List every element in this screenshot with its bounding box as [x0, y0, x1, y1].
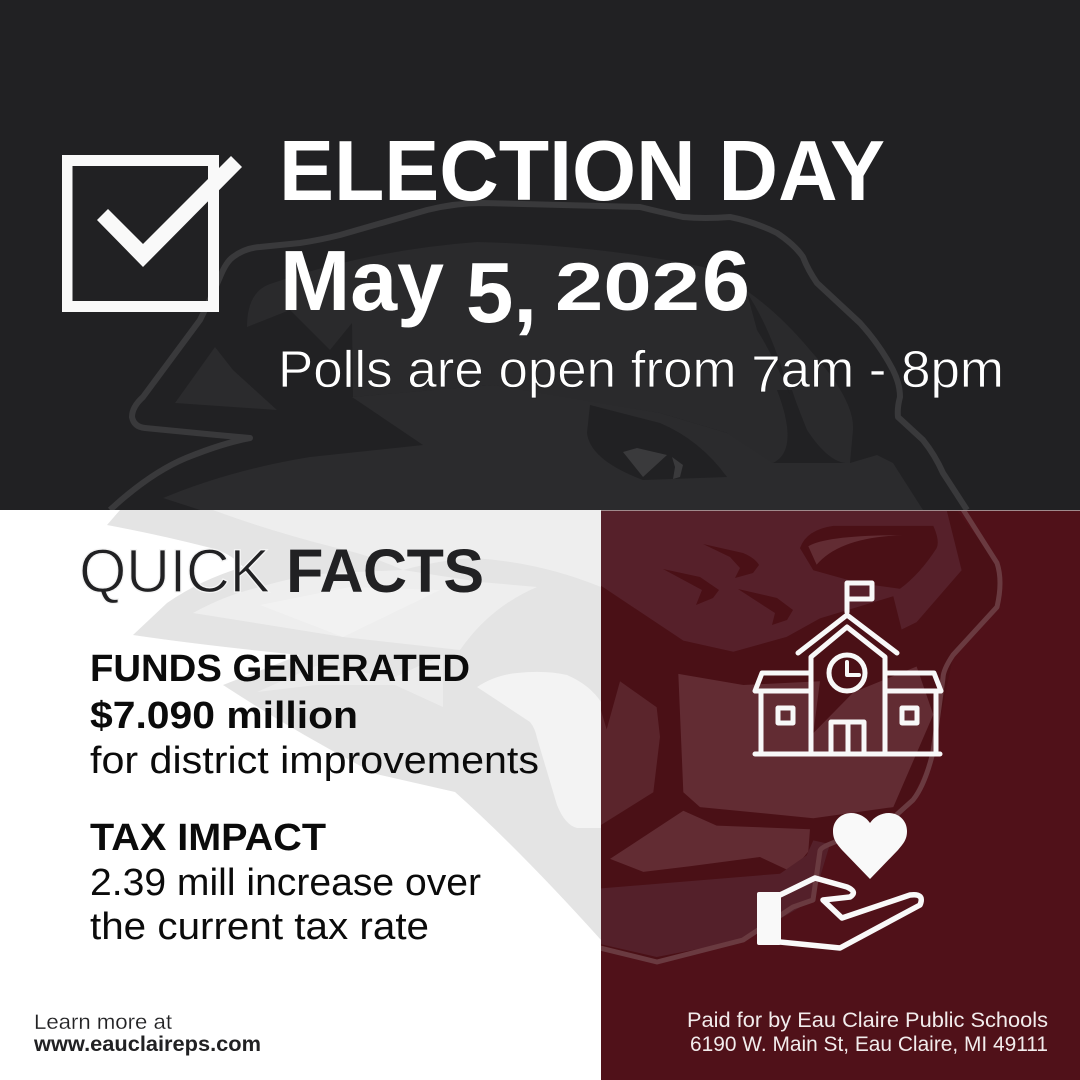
text: learn more	[33, 1011, 261, 1056]
heading: quick facts: QUICK FACTS	[79, 537, 484, 605]
title: election day: ELECTION DAY	[279, 124, 885, 219]
icon: heart above open hand	[757, 813, 921, 948]
text: poll hours: am - 8pm	[781, 341, 1004, 399]
text: tax impact: 2.39 mill increase over	[90, 862, 481, 904]
icon: checkbox with check mark	[62, 155, 242, 312]
icon: heart	[833, 813, 907, 879]
text: funds generated: $7.090 million	[90, 695, 358, 737]
text: learn more: Learn more at	[34, 1011, 172, 1034]
text: funds generated: for district improvements	[90, 740, 539, 782]
text: paid for by	[687, 1009, 1048, 1056]
divider: panel hairline	[601, 510, 1080, 511]
text: learn more: www.eauclaireps.com	[33, 1033, 261, 1056]
title: date: 6	[702, 234, 750, 329]
icon: hand	[757, 878, 921, 948]
panel: dark election header	[0, 0, 1080, 510]
text: poll hours: Polls are open from	[278, 341, 729, 399]
text: funds generated	[90, 648, 539, 782]
title: date: 202	[555, 249, 700, 325]
watermark: mascot on white panel	[107, 510, 601, 940]
icon: school building	[755, 583, 941, 754]
text: tax impact	[90, 817, 481, 948]
text: tax impact: TAX IMPACT	[90, 817, 326, 859]
panel: white quick facts	[0, 510, 601, 1080]
text: paid for by: Paid for by Eau Claire Public Schools	[687, 1009, 1048, 1032]
title: date: 5,	[466, 246, 537, 341]
panel: maroon icon panel	[601, 510, 1080, 1080]
watermark: mascot on maroon panel	[600, 500, 1000, 962]
watermark: mascot on dark header	[110, 203, 967, 510]
title: date: May	[280, 234, 444, 329]
text: poll hours: 7	[751, 346, 781, 404]
text: funds generated: FUNDS GENERATED	[90, 648, 470, 690]
text: tax impact: the current tax rate	[90, 906, 429, 948]
text: paid for by: 6190 W. Main St, Eau Claire, MI 49111	[690, 1033, 1048, 1056]
